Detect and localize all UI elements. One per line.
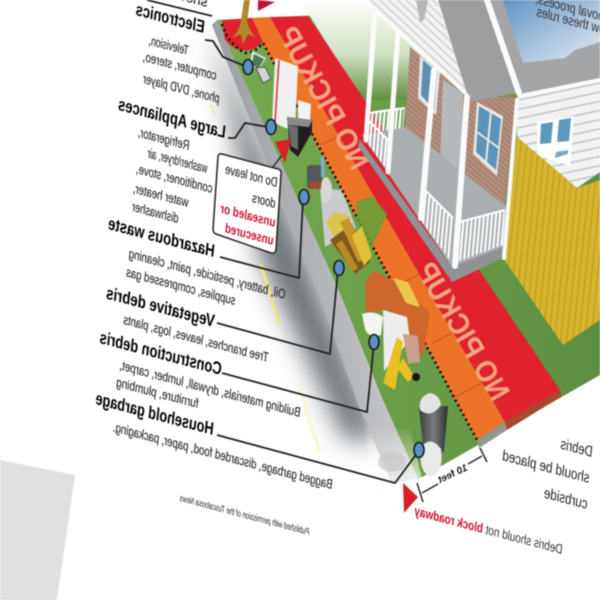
roof right xyxy=(490,0,600,97)
label: hazardous waste xyxy=(107,214,286,308)
strip slab edge xyxy=(477,390,562,448)
label: electronics: Television, xyxy=(148,32,189,58)
gable siding xyxy=(367,0,467,93)
label: electronics: phone, DVD player xyxy=(142,71,220,106)
note: debris curbside xyxy=(502,435,593,512)
label: vegetative debris xyxy=(105,284,269,365)
faint yellow streaks xyxy=(210,105,320,453)
label: construction debris: Building materials, drywall, lumber, carpet, xyxy=(119,357,301,420)
panel: no pickup red strip xyxy=(270,16,560,422)
icon: construction debris xyxy=(362,270,430,390)
railings xyxy=(366,108,505,262)
callout: do not leave doors unsealed: doors xyxy=(251,190,276,211)
label: hazardous waste: Oil, battery, pesticide, paint, cleaning xyxy=(128,246,286,302)
label: large appliances: dishwasher xyxy=(131,199,179,226)
icon: tree xyxy=(232,0,256,44)
brick wall xyxy=(405,47,516,225)
callout: do not leave doors unsealed: unsealed or xyxy=(219,200,276,230)
roof gable xyxy=(438,0,516,102)
label: construction debris: Construction debris xyxy=(98,328,223,379)
fence xyxy=(503,137,600,345)
curb xyxy=(212,20,418,484)
icon: large appliances xyxy=(272,58,312,157)
label: electronics: Electronics xyxy=(135,0,206,37)
porch floor xyxy=(362,127,507,267)
label: large appliances: Large Appliances xyxy=(117,95,227,142)
label: construction debris: furniture, plumbing xyxy=(115,374,199,411)
label: large appliances xyxy=(117,95,227,226)
dotted pickup boundary xyxy=(222,24,477,440)
label: vegetative debris: Tree branches, leaves, logs, plants xyxy=(123,312,269,365)
credit line: Published with permission of the Tuscaloosa News xyxy=(179,492,310,537)
NO PICKUP lettering lower: NO PICKUP xyxy=(409,257,515,407)
panel: pickup orange strip xyxy=(248,17,505,440)
dimension: 10 feet xyxy=(403,448,487,513)
right wall xyxy=(517,78,600,188)
orange strip joints xyxy=(320,135,482,397)
label: electronics xyxy=(135,0,220,106)
label: hazardous waste: Hazardous waste xyxy=(107,214,216,261)
callout: do not leave doors unsealed xyxy=(213,139,291,253)
blue callout dots xyxy=(243,60,424,458)
right wall window xyxy=(537,116,574,166)
curb shadow xyxy=(212,26,380,440)
dimension: 10 feet: 10 feet xyxy=(436,462,469,486)
door xyxy=(440,80,463,185)
label: electronics: computer, stereo, xyxy=(142,49,217,83)
porch slab side xyxy=(358,140,503,282)
label: hazardous waste: supplies, compressed gas xyxy=(125,264,236,308)
red tree patch xyxy=(222,18,263,51)
icon: electronics pile xyxy=(250,51,271,83)
label: large appliances: conditioner, stove, xyxy=(135,161,213,196)
trim and columns xyxy=(364,0,600,266)
label: large appliances: Refrigerator, xyxy=(137,124,190,153)
leader lines xyxy=(147,0,418,483)
icon: hazardous containers xyxy=(307,157,332,202)
porch window 2 xyxy=(473,102,503,176)
roof skylight xyxy=(503,0,600,63)
fading lawn behind porch xyxy=(300,0,600,100)
gray panel corner xyxy=(0,460,75,600)
icon: top red arrow xyxy=(258,0,275,11)
driveway xyxy=(320,188,356,247)
note: debris curbside: curbside xyxy=(543,484,588,512)
callout: do not leave doors unsealed: Do not leave xyxy=(224,161,278,190)
icon: trash can and bags xyxy=(378,393,448,477)
NO PICKUP lettering upper: NO PICKUP xyxy=(271,21,376,175)
icon: vegetative debris xyxy=(326,196,387,274)
callout: do not leave doors unsealed: unsecured xyxy=(224,220,274,248)
note: debris curbside: should be placed xyxy=(502,447,590,486)
label: household garbage: Bagged garbage, discarded food, paper, packaging. xyxy=(112,419,333,492)
curb end fade xyxy=(365,425,425,497)
ground: lawn xyxy=(217,15,600,480)
note: do not block roadway: Debris should not block roadway xyxy=(413,503,563,557)
house xyxy=(358,0,600,345)
label: construction debris xyxy=(98,328,301,420)
label: vegetative debris: Vegetative debris xyxy=(105,284,216,331)
label: large appliances: washer/dryer, air xyxy=(147,145,209,176)
note: debris curbside: Debris xyxy=(560,435,593,460)
porch window 1 xyxy=(418,56,440,115)
gable vent xyxy=(416,0,428,22)
label: household garbage: Household garbage xyxy=(94,389,215,439)
label: large appliances: water heater, xyxy=(133,180,190,211)
